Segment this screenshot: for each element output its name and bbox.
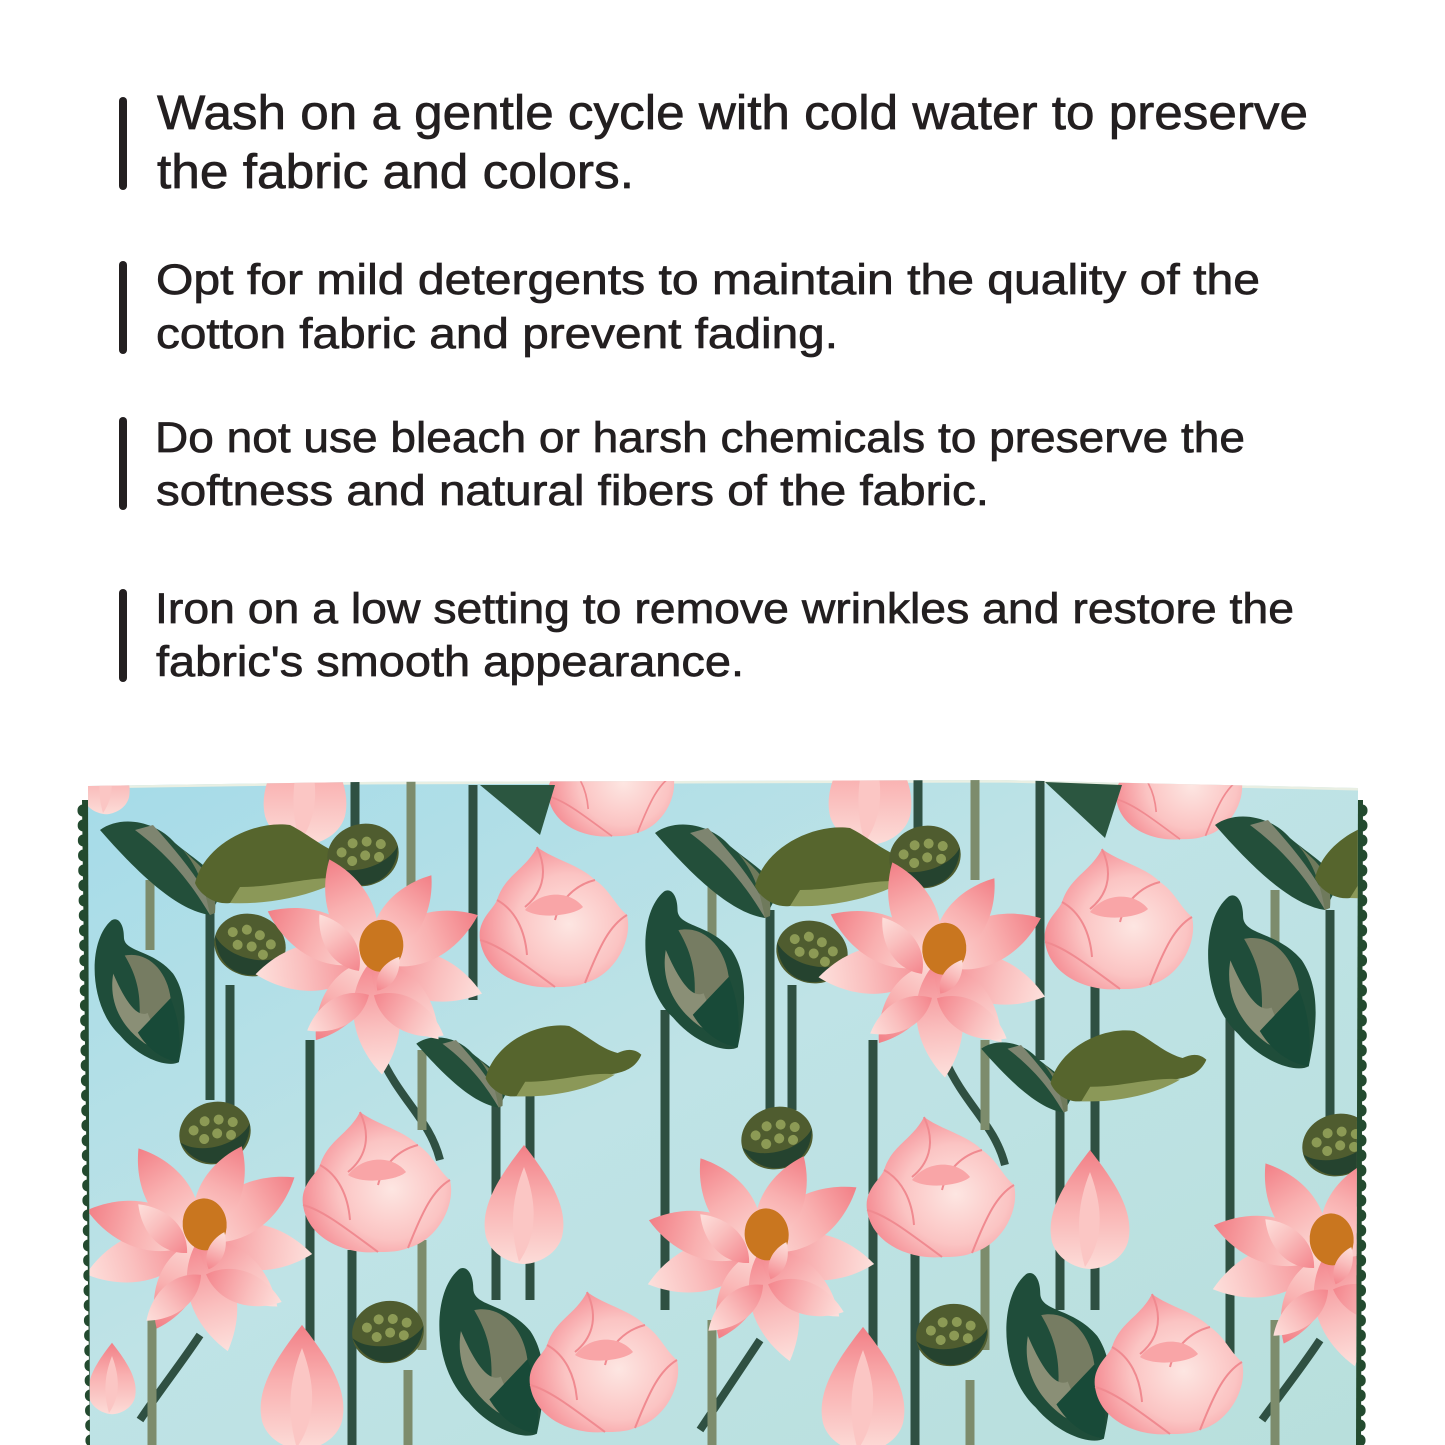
top row flowers (88, 780, 1242, 844)
text block: no bleach instruction: Do not use bleach or harsh chemicals to preserve the (155, 414, 1245, 462)
half-open flowers (303, 847, 1243, 1434)
text block: ironing instruction (119, 585, 1294, 686)
text block: gentle wash instruction (119, 87, 1308, 199)
fabric panel with print (88, 780, 1358, 1445)
open lotus flowers (89, 859, 1357, 1366)
text block: mild detergents instruction: Opt for mild detergents to maintain the quality of the (156, 256, 1260, 304)
text block: ironing instruction: fabric's smooth appearance. (156, 638, 744, 686)
text block: gentle wash instruction: Wash on a gentle cycle with cold water to preserve (157, 87, 1308, 140)
text block: mild detergents instruction: cotton fabric and prevent fading. (156, 310, 838, 358)
text block: no bleach instruction (119, 414, 1245, 515)
seed pods (172, 816, 1381, 1372)
text block: ironing instruction: Iron on a low setting to remove wrinkles and restore the (155, 585, 1294, 633)
fabric crochet edging (83, 800, 1362, 1445)
stems (140, 780, 1330, 1445)
closed buds (88, 1145, 1129, 1445)
text block: gentle wash instruction: the fabric and colors. (157, 146, 634, 199)
photo: lotus print fabric (78, 780, 1368, 1445)
wide leaves (100, 816, 1445, 1112)
text block: no bleach instruction: softness and natural fibers of the fabric. (156, 467, 989, 515)
text block: mild detergents instruction (119, 256, 1260, 358)
dark folded leaves (95, 782, 1316, 1441)
